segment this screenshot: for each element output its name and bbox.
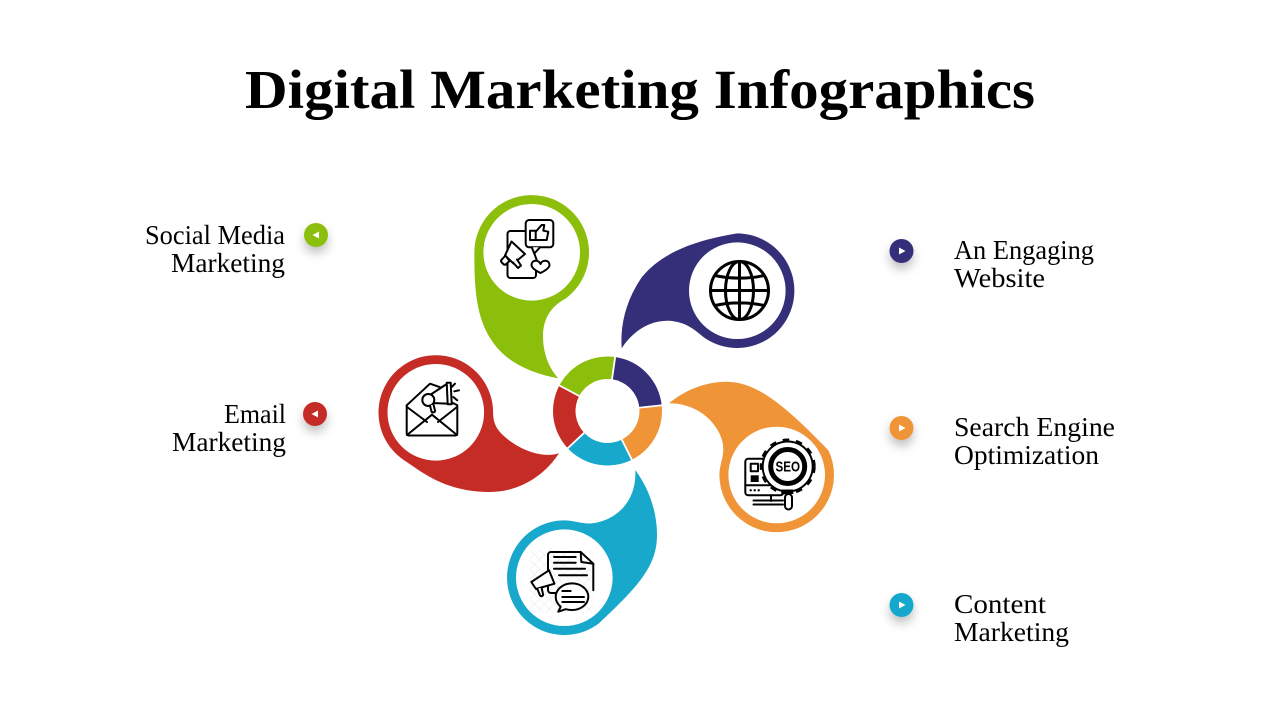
title: Digital Marketing Infographics [245,59,1035,120]
label: search engine optimization: Search Engine [954,412,1115,442]
label: email marketing: Email [224,399,286,429]
label: content marketing: Marketing [954,617,1069,647]
bullet: purple [890,239,914,263]
donut segment: teal [568,433,632,465]
icon: document, megaphone and speech bubble [530,550,593,613]
donut segment: purple [612,357,662,408]
label: an engaging website [954,235,1094,293]
label: search engine optimization [954,412,1115,470]
icon text: SEO: SEO [776,458,800,476]
label: search engine optimization: Optimization [954,440,1099,470]
label: content marketing [954,589,1069,647]
pin: content marketing (teal) [507,470,657,635]
pin: email marketing (red) [379,355,559,492]
donut segment: orange [622,405,662,460]
label: email marketing: Marketing [172,427,286,457]
bullet: red [303,402,327,426]
label: social media marketing: Social Media [145,220,285,250]
pin: website (purple) [621,233,794,348]
icon: globe [710,262,768,320]
icon: phone with megaphone, like and heart [501,220,553,278]
panel: pinwheel diagram [379,195,834,635]
donut segment: red [553,385,584,448]
bullet: teal [890,593,914,617]
label: social media marketing: Marketing [171,248,285,278]
label: an engaging website: Website [954,263,1045,293]
bullet: green [304,223,328,247]
icon: SEO magnifier and gear [745,440,814,510]
pin: social media (green) [474,195,589,378]
icon: open envelope with megaphone [407,383,459,436]
label: content marketing: Content [954,589,1047,619]
center donut [553,354,664,465]
donut segment: green [559,356,615,396]
pin: search engine optimization (orange) [669,382,834,532]
label: an engaging website: An Engaging [954,235,1094,265]
bullet: orange [890,416,914,440]
label: social media marketing [145,220,285,278]
label: email marketing [172,399,286,457]
